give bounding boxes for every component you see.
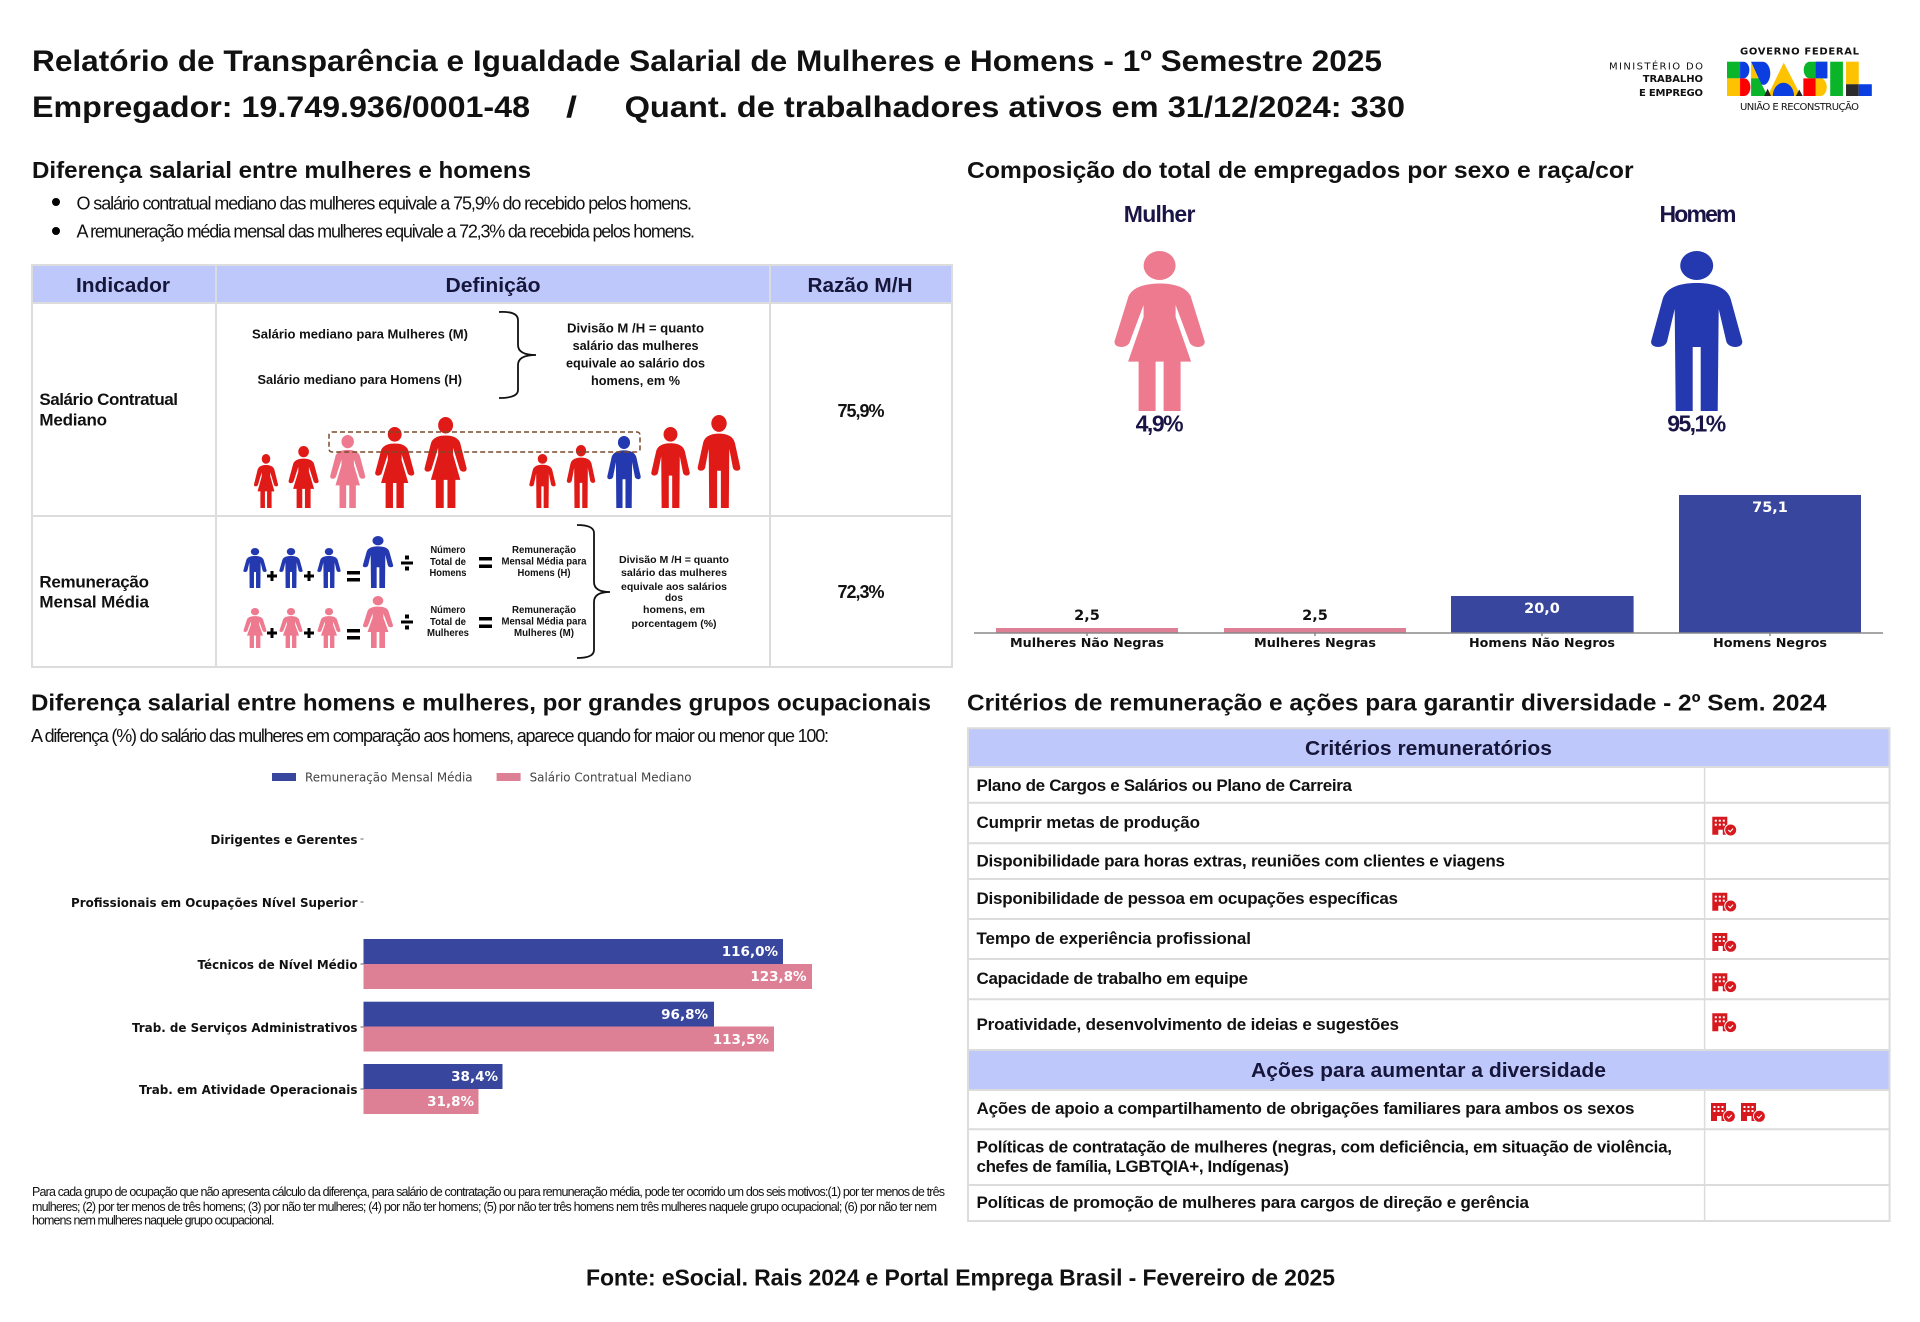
row label: remuneracao mensal media: Mensal Média [39, 593, 150, 612]
definition: men average formula: Mensal Média para [502, 556, 587, 568]
table header: Indicador [76, 275, 170, 297]
definition: median salary formula [252, 312, 705, 398]
definition: women average formula: Mulheres [427, 628, 469, 639]
row label: salario contratual mediano: Salário Contratual [39, 390, 178, 409]
criteria rows: Proatividade, desenvolvimento de ideias e sugestões [976, 1015, 1399, 1034]
horizontal bar chart [71, 832, 812, 1114]
criteria rows: Disponibilidade de pessoa em ocupações específicas [976, 889, 1398, 908]
definition: median salary formula: homens, em % [591, 373, 680, 388]
definition: men average formula: Remuneração [512, 545, 576, 556]
definition: median salary formula: Divisão M /H = quanto [567, 321, 704, 336]
bar: Mulheres Não Negras [996, 608, 1178, 650]
definition: women average formula: Número [430, 605, 466, 616]
panel: salary difference between women and men [32, 157, 952, 667]
bullet list: A remuneração média mensal das mulheres equivale a 72,3% da recebida pelos homens. [76, 222, 695, 242]
bar: Mulheres Negras [1224, 608, 1406, 650]
icons: women ordered by salary with median highlighted [254, 417, 467, 508]
footnote: mulheres; (2) por ter menos de três homens; (3) por não ter mulheres; (4) por não ter homens; (5) por não ter três homens nem três mulheres naquele grupo ocupacional; (6) por não ter nem [32, 1200, 937, 1214]
division explanation: porcentagem (%) [632, 619, 716, 630]
dashed median highlight [329, 432, 640, 452]
footnote: Para cada grupo de ocupação que não apresenta cálculo da diferença, para salário de contratação ou para remuneração média, pode ter ocorrido um dos seis motivos:(1) por ter menos de três [32, 1185, 945, 1199]
group: Profissionais: Profissionais em Ocupações Nível Superior [71, 895, 358, 910]
icons: men ordered by salary with median highlighted [529, 415, 740, 508]
title line 2 [32, 91, 1405, 124]
ministry name: MINISTÉRIO DO [1609, 59, 1703, 72]
header: criterios remuneratorios: Critérios remuneratórios [1305, 738, 1552, 760]
criteria table [968, 728, 1890, 1221]
group: Técnicos de Nível Médio: Técnicos de Nível Médio [198, 957, 358, 972]
group: Técnicos de Nível Médio: 123,8% [750, 969, 807, 985]
definition: women average formula: Mulheres (M) [514, 628, 574, 639]
definition: men average formula: Homens (H) [518, 568, 570, 579]
definition: men average formula: Número [430, 545, 466, 556]
heading: Composição do total de empregados por sexo e raça/cor [967, 157, 1634, 183]
bar: Mulheres Não Negras: Mulheres Não Negras [1010, 635, 1164, 650]
bar: Homens Não Negros: 20,0 [1524, 601, 1560, 617]
group: Trab. em Atividade Operacionais: 31,8% [427, 1094, 474, 1110]
ministry name: TRABALHO [1643, 74, 1703, 85]
panel: salary difference by occupational group [31, 690, 945, 1228]
logo: ministry and Brazilian federal government [1609, 46, 1872, 113]
group: Trab. em Atividade Operacionais [139, 1064, 502, 1114]
action rows: Políticas de contratação de mulheres (negras, com deficiência, em situação de violência, [976, 1138, 1672, 1157]
criteria rows: Capacidade de trabalho em equipe [976, 969, 1248, 988]
woman pictogram [1114, 201, 1205, 437]
definition: median salary formula: salário das mulheres [573, 338, 699, 353]
bar: Mulheres Negras: Mulheres Negras [1254, 635, 1376, 650]
ministry name: E EMPREGO [1639, 88, 1703, 99]
legend: Salário Contratual Mediano [530, 770, 692, 784]
employer icons: actions [1711, 1103, 1765, 1122]
heading: Diferença salarial entre mulheres e homens [32, 157, 531, 183]
bar: Mulheres Não Negras: 2,5 [1074, 608, 1100, 624]
title line 2: Empregador: 19.749.936/0001-48 [32, 91, 530, 124]
definition: median salary formula: Salário mediano para Homens (H) [258, 372, 462, 387]
BRASIL colored wordmark [1727, 62, 1872, 96]
uniao e reconstrucao text: UNIÃO E RECONSTRUÇÃO [1740, 100, 1859, 113]
division explanation: dos [665, 593, 683, 604]
bullet list [52, 194, 695, 242]
row label: remuneracao mensal media: Remuneração [39, 573, 149, 592]
source line: Fonte: eSocial. Rais 2024 e Portal Emprega Brasil - Fevereiro de 2025 [586, 1265, 1335, 1291]
table header [32, 265, 952, 303]
employer icons: criteria [1712, 817, 1737, 1033]
panel: remuneration criteria and diversity actions [967, 690, 1890, 1221]
definition: men average formula [243, 536, 587, 588]
bar: Homens Não Negros [1451, 596, 1634, 650]
bar chart: composition [974, 495, 1883, 650]
definition: men average formula: Homens [430, 568, 467, 579]
header [32, 45, 1405, 124]
group: Trab. em Atividade Operacionais: Trab. em Atividade Operacionais [139, 1082, 358, 1097]
footnote: homens nem mulheres naquele grupo ocupacional. [32, 1214, 274, 1228]
legend: Remuneração Mensal Média [305, 770, 473, 784]
legend [272, 770, 692, 784]
table header: Razão M/H [808, 275, 912, 297]
bar: Homens Negros: Homens Negros [1713, 635, 1827, 650]
man pictogram: Homem [1660, 201, 1736, 227]
title line 2: Quant. de trabalhadores ativos em 31/12/2024: 330 [625, 91, 1405, 124]
panel: workforce composition by sex and race [967, 157, 1883, 650]
value: 72,3%: 72,3% [838, 582, 884, 602]
header: acoes para aumentar a diversidade: Ações para aumentar a diversidade [1251, 1060, 1606, 1082]
group: Trab. de Serviços Administrativos [132, 1002, 774, 1052]
heading: Diferença salarial entre homens e mulheres, por grandes grupos ocupacionais [31, 690, 931, 716]
action rows [976, 1099, 1672, 1212]
governo federal text: GOVERNO FEDERAL [1740, 46, 1860, 57]
woman pictogram: 4,9% [1136, 411, 1184, 437]
division explanation: equivale aos salários [621, 582, 727, 593]
group: Dirigentes e Gerentes: Dirigentes e Gerentes [210, 832, 358, 847]
criteria rows: Disponibilidade para horas extras, reuniões com clientes e viagens [976, 852, 1505, 871]
criteria rows: Plano de Cargos e Salários ou Plano de Carreira [976, 776, 1353, 795]
bar: Homens Não Negros: Homens Não Negros [1469, 635, 1615, 650]
bar: Homens Negros [1679, 495, 1861, 650]
row label: remuneracao mensal media [39, 573, 150, 612]
table header: Definição [446, 275, 540, 297]
criteria rows: Cumprir metas de produção [976, 813, 1200, 832]
group: Técnicos de Nível Médio: 116,0% [722, 944, 778, 960]
man pictogram [1651, 201, 1742, 437]
definition: median salary formula: equivale ao salário dos [566, 356, 705, 371]
group: Trab. de Serviços Administrativos: Trab. de Serviços Administrativos [132, 1020, 358, 1035]
title line 1: Relatório de Transparência e Igualdade Salarial de Mulheres e Homens - 1º Semestre 2025 [32, 45, 1382, 78]
group: Trab. de Serviços Administrativos: 113,5% [713, 1032, 769, 1048]
criteria rows: Tempo de experiência profissional [976, 929, 1251, 948]
division explanation: salário das mulheres [621, 568, 727, 579]
definition: women average formula: Remuneração [512, 605, 576, 616]
title line 2: / [566, 91, 578, 124]
definition: women average formula: Mensal Média para [502, 616, 587, 628]
definition: men average formula: Total de [430, 557, 466, 568]
row label: salario contratual mediano: Mediano [39, 411, 107, 430]
action rows: Políticas de promoção de mulheres para cargos de direção e gerência [976, 1193, 1530, 1212]
bar: Mulheres Negras: 2,5 [1302, 608, 1328, 624]
row label: salario contratual mediano [39, 390, 178, 430]
man pictogram: 95,1% [1667, 411, 1726, 437]
ministry name [1609, 59, 1703, 99]
division explanation [577, 525, 729, 658]
header: criterios remuneratorios [968, 728, 1890, 767]
definition: women average formula: Total de [430, 617, 466, 628]
value: 75,9%: 75,9% [838, 401, 884, 421]
indicator table [32, 265, 952, 667]
criteria rows [976, 776, 1505, 1034]
bullet list: O salário contratual mediano das mulheres equivale a 75,9% do recebido pelos homens. [76, 194, 692, 214]
woman pictogram: Mulher [1124, 201, 1195, 227]
footnote [32, 1185, 945, 1228]
heading: Critérios de remuneração e ações para garantir diversidade - 2º Sem. 2024 [967, 690, 1827, 716]
subtitle: A diferença (%) do salário das mulheres em comparação aos homens, aparece quando for maior ou menor que 100: [31, 726, 829, 746]
definition: women average formula [243, 596, 587, 648]
division explanation: homens, em [643, 605, 705, 616]
header: acoes para aumentar a diversidade [968, 1050, 1890, 1090]
definition: median salary formula: Salário mediano para Mulheres (M) [252, 327, 468, 342]
bar: Homens Negros: 75,1 [1752, 500, 1788, 516]
action rows: chefes de família, LGBTQIA+, Indígenas) [976, 1157, 1289, 1176]
group: Técnicos de Nível Médio [198, 939, 812, 989]
division explanation: Divisão M /H = quanto [619, 555, 729, 566]
group: Trab. em Atividade Operacionais: 38,4% [451, 1069, 498, 1085]
action rows: Ações de apoio a compartilhamento de obrigações familiares para ambos os sexos [976, 1099, 1634, 1118]
group: Trab. de Serviços Administrativos: 96,8% [661, 1007, 708, 1023]
